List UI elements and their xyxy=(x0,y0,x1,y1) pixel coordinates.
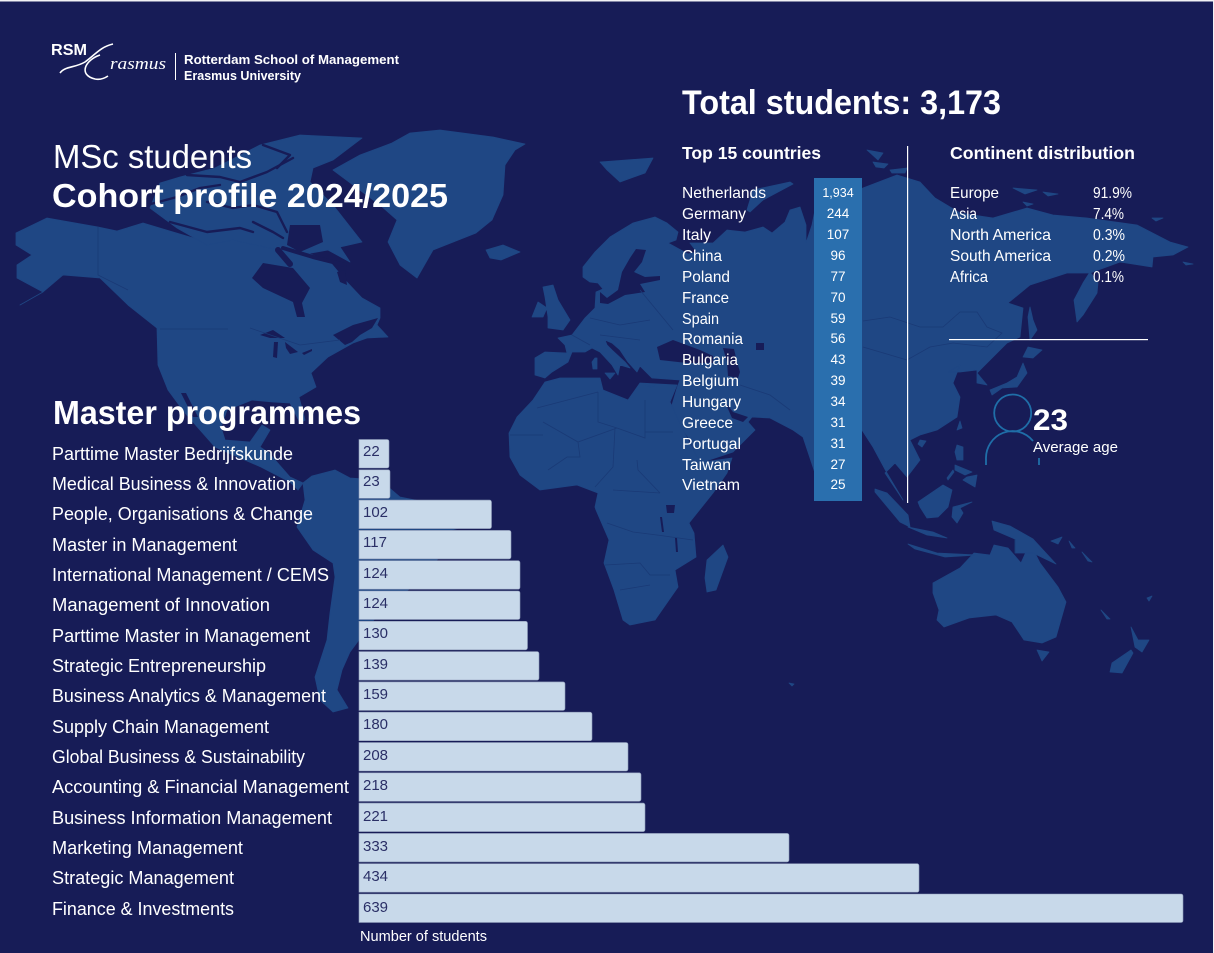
bar values xyxy=(363,443,388,916)
bar values: 221 xyxy=(363,808,388,825)
country values: 1,934 xyxy=(822,186,854,200)
country values: 107 xyxy=(827,227,849,242)
country values: 31 xyxy=(830,436,846,451)
world map xyxy=(16,130,1193,712)
country names: Germany xyxy=(682,206,746,223)
country names: Taiwan xyxy=(682,457,731,474)
bar values: 130 xyxy=(363,625,388,642)
country names xyxy=(682,185,766,494)
highlight column xyxy=(814,178,862,501)
programme labels: Strategic Management xyxy=(52,868,234,888)
hudson bay and nearby waters xyxy=(252,225,378,345)
programme labels: Business Information Management xyxy=(52,808,332,828)
bar values: 159 xyxy=(363,686,388,703)
programme labels: Strategic Entrepreneurship xyxy=(52,656,266,676)
panel: top 15 countries xyxy=(682,143,862,501)
continent rows: 0.3% xyxy=(1093,227,1125,244)
country names: Romania xyxy=(682,331,743,348)
continent rows: North America xyxy=(950,227,1051,244)
panel: average age xyxy=(986,394,1118,465)
programme labels: Supply Chain Management xyxy=(52,717,269,737)
country values: 70 xyxy=(830,290,846,305)
continent rows: 7.4% xyxy=(1093,206,1124,223)
country values xyxy=(822,186,854,492)
country borders xyxy=(98,227,1015,590)
heading: total students: Total students: 3,173 xyxy=(682,84,1001,122)
continent rows: 0.1% xyxy=(1093,269,1124,286)
land: north america xyxy=(16,218,388,490)
land: eurasia xyxy=(535,175,1188,500)
title: Cohort profile 2024/2025 xyxy=(52,177,448,214)
programme labels xyxy=(52,444,349,919)
inland seas xyxy=(600,249,764,422)
country names: Italy xyxy=(682,227,711,244)
continent rows xyxy=(950,185,1132,286)
programme labels: Finance & Investments xyxy=(52,899,234,919)
african lakes xyxy=(660,505,678,552)
country values: 34 xyxy=(830,394,846,409)
heading: master programmes: Master programmes xyxy=(53,394,361,431)
logo: Erasmus signature xyxy=(60,44,166,79)
country names: Netherlands xyxy=(682,185,766,202)
bar values: 23 xyxy=(363,473,380,490)
land: kamchatka and sakhalin xyxy=(1028,272,1098,340)
average age label: Average age xyxy=(1033,439,1118,456)
logo: Erasmus signature: rasmus xyxy=(110,54,166,73)
heading: continent distribution: Continent distribution xyxy=(950,143,1135,163)
programme labels: Parttime Master Bedrijfskunde xyxy=(52,444,293,464)
programme labels: Business Analytics & Management xyxy=(52,686,326,706)
logo: RSM wordmark: RSM xyxy=(51,42,87,59)
programme labels: Master in Management xyxy=(52,535,237,555)
bar values: 124 xyxy=(363,595,388,612)
country values: 96 xyxy=(830,248,846,263)
arctic channels xyxy=(147,145,345,265)
axis label: Number of students xyxy=(360,929,487,945)
bar values: 434 xyxy=(363,868,388,885)
panel: master programmes xyxy=(52,394,1183,945)
country names: Greece xyxy=(682,415,733,432)
continent rows: 91.9% xyxy=(1093,185,1132,202)
bar values: 139 xyxy=(363,656,388,673)
bar values: 180 xyxy=(363,716,388,733)
country names: France xyxy=(682,290,729,307)
country names: China xyxy=(682,248,722,265)
programme labels: People, Organisations & Change xyxy=(52,504,313,524)
bar values: 333 xyxy=(363,838,388,855)
country values: 77 xyxy=(830,269,846,284)
land: africa xyxy=(509,378,732,625)
logo xyxy=(51,42,400,83)
land: australia xyxy=(933,543,1066,661)
country names: Hungary xyxy=(682,394,741,411)
bar values: 124 xyxy=(363,565,388,582)
country names: Spain xyxy=(682,311,719,328)
programme labels: Parttime Master in Management xyxy=(52,626,310,646)
land: canadian arctic archipelago xyxy=(150,135,362,262)
heading: top 15 countries: Top 15 countries xyxy=(682,143,821,163)
bar chart xyxy=(359,440,1183,922)
bar values: 208 xyxy=(363,747,388,764)
panel: continent distribution xyxy=(950,143,1135,286)
icon: person xyxy=(986,394,1039,465)
country values: 39 xyxy=(830,373,846,388)
bar values: 218 xyxy=(363,777,388,794)
bar values: 639 xyxy=(363,899,388,916)
continent rows: Europe xyxy=(950,185,999,202)
logo: school name: Rotterdam School of Management xyxy=(184,52,400,67)
country names: Belgium xyxy=(682,373,739,390)
country values: 31 xyxy=(830,415,846,430)
continent rows: South America xyxy=(950,248,1051,265)
continent rows: Africa xyxy=(950,269,988,286)
country names: Bulgaria xyxy=(682,352,738,369)
country values: 59 xyxy=(830,311,846,326)
programme labels: Accounting & Financial Management xyxy=(52,777,349,797)
bar values: 102 xyxy=(363,504,388,521)
bar values: 117 xyxy=(363,534,387,551)
country values: 43 xyxy=(830,352,846,367)
programme labels: Marketing Management xyxy=(52,838,243,858)
programme labels: International Management / CEMS xyxy=(52,565,329,585)
country names: Vietnam xyxy=(682,477,740,494)
logo: university name: Erasmus University xyxy=(184,68,302,83)
land: south america xyxy=(297,470,490,712)
country values: 27 xyxy=(830,457,846,472)
programme labels: Global Business & Sustainability xyxy=(52,747,305,767)
programme labels: Management of Innovation xyxy=(52,595,270,615)
programme labels: Medical Business & Innovation xyxy=(52,474,296,494)
average age value: 23 xyxy=(1033,404,1068,437)
title: MSc students xyxy=(53,138,252,175)
great lakes xyxy=(181,330,312,417)
land: greenland xyxy=(333,130,525,278)
title xyxy=(52,138,448,214)
land: islands xyxy=(486,150,1193,686)
bar values: 22 xyxy=(363,443,380,460)
country values: 244 xyxy=(827,206,850,221)
continent rows: Asia xyxy=(950,206,977,223)
continent rows: 0.2% xyxy=(1093,248,1125,265)
country names: Portugal xyxy=(682,436,741,453)
country values: 25 xyxy=(830,477,846,492)
country names: Poland xyxy=(682,269,730,286)
country values: 56 xyxy=(830,331,846,346)
